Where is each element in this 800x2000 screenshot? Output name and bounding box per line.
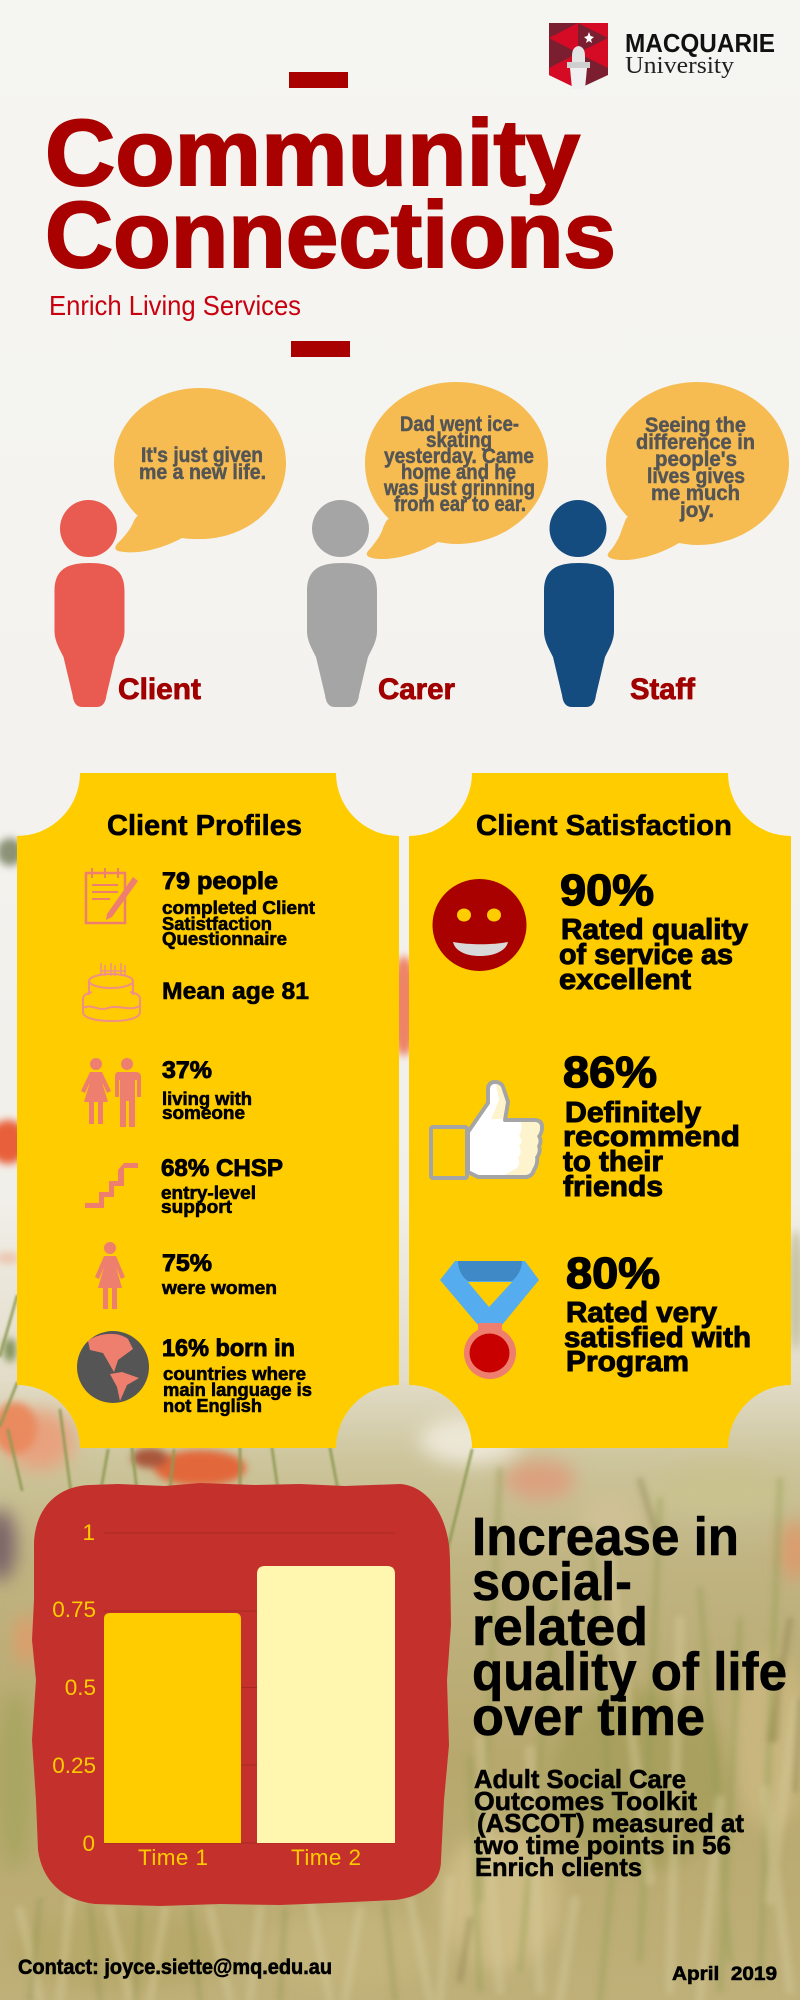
quote text: joy. [679,499,714,522]
y axis labels: 0.75 [52,1597,96,1622]
label: staff: Staff [630,673,696,706]
text: 90% [559,866,748,996]
text: 86%: 86% [563,1048,657,1097]
text: 16% born in: 16% born in [162,1335,295,1362]
title [45,100,616,287]
heading: client satisfaction: Client Satisfaction [476,810,732,842]
quote text [383,413,535,516]
text: ASCOT description: Enrich clients [475,1852,642,1882]
heading: increase in quality of life: related [472,1597,648,1657]
text: 80%: Rated very [566,1297,717,1329]
quote text [636,414,755,522]
title block [45,72,616,357]
speech bubble: client [114,388,286,552]
heading: increase in quality of life: quality of life [472,1642,787,1702]
text: 37%: someone [162,1103,245,1123]
x axis labels [138,1845,361,1870]
quote text: Dad went ice- [400,413,519,436]
text: 16% born in: main language is [163,1380,312,1400]
icon: globe [77,1331,149,1403]
text: 37%: 37% [162,1057,212,1084]
label: client: Client [118,673,201,706]
icon: smiley face [432,879,526,971]
y axis labels: 0.25 [52,1753,96,1778]
icon: person carer [307,500,377,707]
text: 79 people: 79 people [162,868,278,895]
text: 80%: 80% [566,1249,660,1298]
quote text: lives gives [647,465,745,488]
icon: person staff [544,500,614,707]
text: 80% [564,1249,751,1378]
text: 79 people [162,868,315,949]
quote text: people's [655,448,737,471]
title: Connections [45,182,616,287]
icon: stairs [85,1163,138,1208]
icon: shield with lighthouse [549,23,608,89]
text: 86%: Definitely [565,1097,701,1129]
text: 16% born in [162,1335,312,1416]
text: 79 people: Questionnaire [162,929,287,949]
subtitle: Enrich Living Services [49,290,301,321]
icon: woman and man [81,1058,141,1127]
text: 80%: satisfied with [564,1322,751,1354]
quote text: home and he [401,461,516,484]
text: 90%: excellent [559,964,691,996]
logo: Macquarie University [549,23,775,89]
y axis labels: 0 [82,1831,95,1856]
quote text: was just grinning [383,477,535,500]
heading: increase in quality of life [472,1507,787,1747]
text: 86%: recommend [563,1121,740,1153]
quote text [139,444,266,484]
logo: Macquarie University: University [625,53,734,79]
y axis labels: 1 [82,1520,95,1545]
text: 75% [161,1250,277,1298]
quote text: from ear to ear. [394,493,526,516]
title: Community [45,100,580,205]
icon: notepad and pencil [86,868,138,923]
heading: increase in quality of life: Increase in [472,1507,739,1567]
text: 86%: friends [563,1171,663,1203]
quote text: It's just given [141,444,263,467]
text: ASCOT description: Adult Social Care [474,1764,686,1794]
bar: time 1 [104,1613,241,1843]
speech bubble: carer [365,382,548,559]
panel: carer quote [307,382,548,707]
text: 16% born in: countries where [163,1364,306,1384]
text: 75%: were women [161,1278,277,1298]
icon: thumbs up [431,1082,542,1178]
text: ASCOT description [474,1764,744,1882]
text: ASCOT description: two time points in 56 [474,1830,731,1860]
text: ASCOT description: Outcomes Toolkit [474,1786,697,1816]
quote text: difference in [636,431,755,454]
text: date: April 2019 [672,1964,777,1985]
text: 90%: Rated quality [561,914,748,946]
text: 86% [563,1048,740,1203]
x axis labels: Time 1 [138,1845,208,1870]
gridlines [104,1533,395,1843]
text: 80%: Program [566,1346,689,1378]
text: 16% born in: not English [163,1396,262,1416]
panel: bar chart [32,1483,451,1906]
y axis labels [52,1520,96,1856]
icon: woman [95,1242,125,1309]
quote text: me much [651,482,740,505]
wordmark: MACQUARIE [625,28,775,58]
x axis labels: Time 2 [291,1845,361,1870]
y axis labels: 0.5 [65,1675,96,1700]
text: 79 people: completed Client [162,898,315,918]
heading: client profiles: Client Profiles [107,810,302,842]
chart backdrop [32,1483,451,1906]
text: 68% CHSP: entry-level [161,1183,256,1203]
text: ASCOT description: (ASCOT) measured at [477,1808,744,1838]
text: 68% CHSP: 68% CHSP [161,1155,283,1182]
speech bubble: staff [606,382,789,560]
panel: client profiles [17,773,399,1448]
text: 37% [162,1057,252,1123]
icon: birthday cake [83,963,140,1021]
quote text: yesterday. Came [384,445,534,468]
panel: client satisfaction [409,773,791,1448]
text: mean age: Mean age 81 [162,978,309,1005]
heading: increase in quality of life: social- [472,1552,632,1612]
quote text: me a new life. [139,461,266,484]
heading: increase in quality of life: over time [472,1687,705,1747]
label: carer: Carer [378,673,455,706]
quote text: skating [426,429,492,452]
icon: person client [54,500,124,707]
text: 79 people: Satistfaction [162,914,272,934]
panel: staff quote [544,382,789,707]
text: 90%: 90% [560,866,654,915]
text: 68% CHSP [161,1155,283,1217]
bar: time 2 [257,1566,395,1843]
text: 86%: to their [563,1146,663,1178]
text: 68% CHSP: support [161,1197,232,1217]
text: contact: Contact: joyce.siette@mq.edu.au [18,1956,332,1979]
text: 75%: 75% [162,1250,212,1277]
quote text: Seeing the [645,414,746,437]
text: 90%: of service as [559,939,733,971]
panel: client quote [54,388,286,707]
text: 37%: living with [162,1089,252,1109]
icon: medal [440,1261,539,1379]
